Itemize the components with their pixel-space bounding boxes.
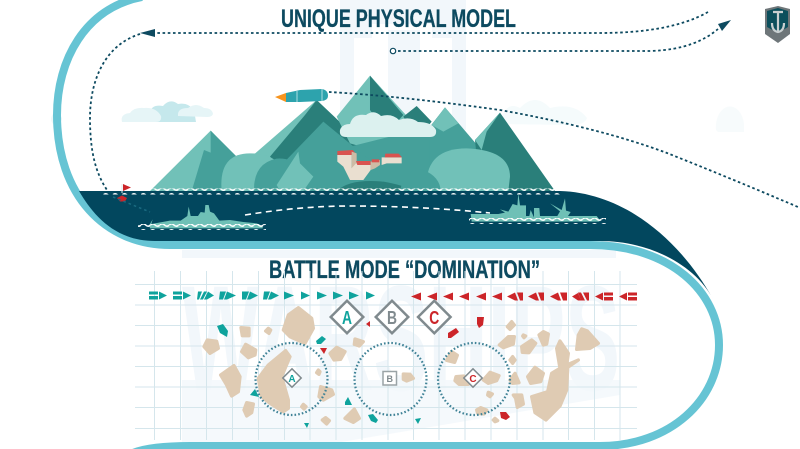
large capture marker A: A (342, 308, 352, 328)
team row: red ship icons (411, 292, 637, 300)
trajectory: shell descending to the right (329, 92, 798, 207)
title: battle mode domination: BATTLE MODE “DOMINATION” (269, 256, 540, 284)
title: unique physical model: UNIQUE PHYSICAL MODEL (281, 5, 516, 33)
small base marker A (283, 369, 301, 387)
shell trajectory: dotted path from top right around to the sea (90, 12, 708, 190)
large capture marker C (418, 301, 451, 333)
team row: teal ship icons (149, 292, 375, 300)
wave lines at the shoreline (100, 188, 560, 194)
cloud: over mountains (340, 112, 436, 137)
trajectory: circle start to right arrow (390, 20, 731, 54)
small base marker B (383, 372, 396, 385)
ships on the map: teal (217, 324, 421, 428)
ships on the map: red (320, 317, 510, 420)
islands: east group (403, 322, 598, 422)
small base marker A: A (288, 374, 296, 385)
white dashed torpedo trajectory (245, 206, 490, 215)
right cruiser (469, 193, 606, 224)
navy sea (79, 191, 713, 299)
underwater trajectory segment (113, 197, 150, 212)
large capture marker B (376, 301, 408, 333)
map grid (135, 271, 637, 440)
islands: west group (204, 308, 363, 424)
small base marker B: B (386, 374, 393, 384)
shell (275, 89, 328, 102)
large capture marker A (331, 301, 363, 333)
mountains (150, 76, 555, 191)
small base marker C: C (469, 374, 477, 385)
cloud: left (122, 101, 213, 122)
arrowhead: left pointing (140, 29, 155, 37)
village on the hillside (337, 150, 402, 180)
large capture marker C: C (429, 308, 439, 328)
small base marker C (464, 369, 482, 387)
buoy with red flag (117, 184, 131, 202)
left battleship (138, 205, 266, 230)
large capture marker B: B (387, 308, 397, 328)
logo shield (765, 6, 790, 43)
capture zone circles (256, 343, 510, 415)
